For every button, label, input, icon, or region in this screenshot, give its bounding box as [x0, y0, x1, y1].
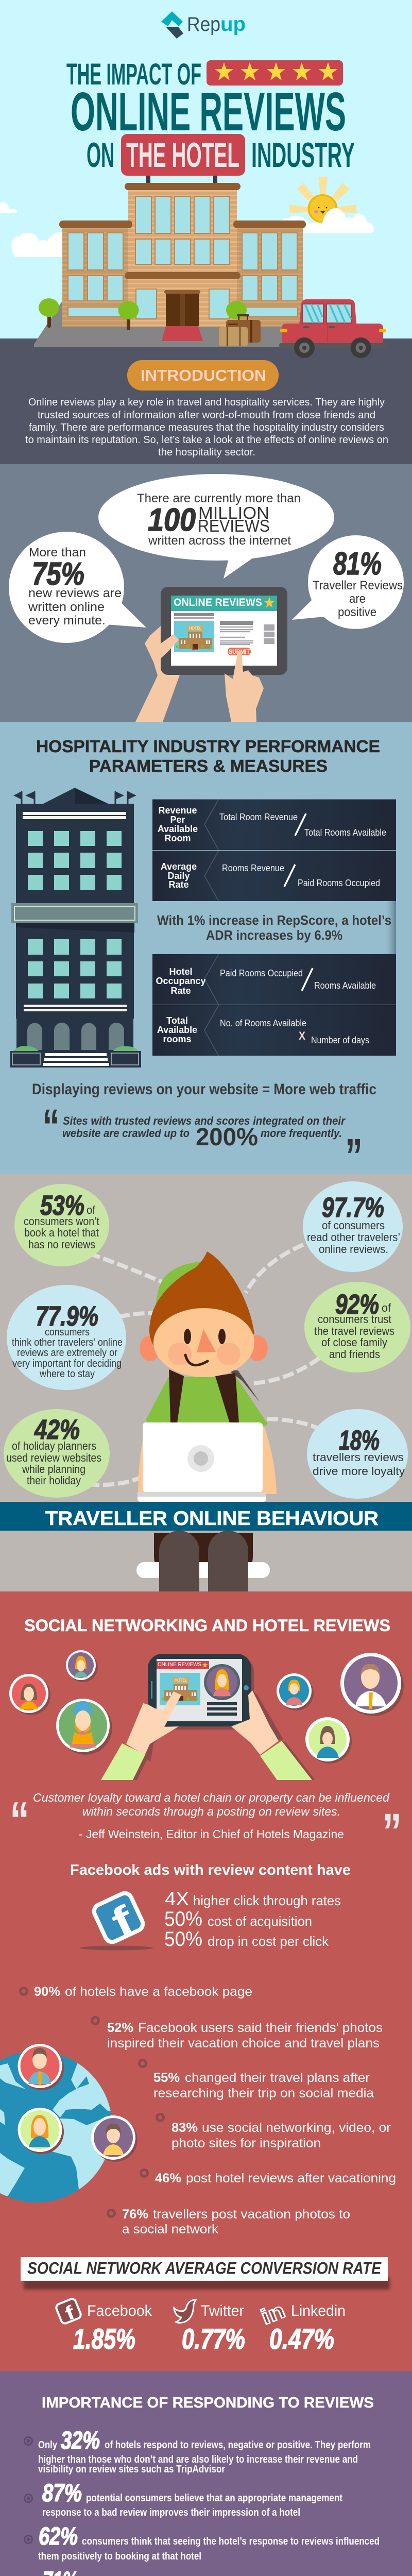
conversion: facebook — [55, 2298, 152, 2355]
speech bubble: 75% — [9, 532, 146, 643]
social tablet with hands — [101, 1654, 315, 1780]
stat: 87% — [42, 2480, 342, 2518]
table row: revenue per available room: Revenue — [158, 805, 197, 816]
quote: customer loyalty: within seconds through a posting on review sites. — [82, 1805, 340, 1818]
panel: social networking — [0, 1616, 404, 2355]
bullets — [24, 2436, 33, 2576]
bubble: 77.9%: 77.9% — [36, 1301, 98, 1332]
social stat list: photo sites for inspiration — [171, 2136, 321, 2150]
facebook ad stats: 50% — [164, 1908, 202, 1930]
table row: hotel occupancy rate — [152, 954, 396, 1005]
quote: crawled 200%: “ — [42, 1099, 60, 1154]
conversion: linkedin: in — [258, 2298, 288, 2329]
introduction paragraph: the hospitality sector. — [158, 447, 255, 458]
facebook ad stats: 4X — [165, 1888, 189, 1909]
speech bubble: 75%: 75% — [32, 556, 84, 592]
tablet with hands — [135, 587, 287, 722]
speech bubble: 75%: More than — [29, 546, 86, 560]
car — [279, 299, 386, 358]
quote: customer loyalty: “ — [10, 1791, 29, 1849]
five star badge — [207, 60, 343, 86]
conversion: twitter — [174, 2300, 245, 2355]
table row: average daily rate — [152, 851, 396, 901]
quote: customer loyalty: - Jeff Weinstein, Editor in Chief of Hotels Magazine — [79, 1827, 344, 1841]
bubble: 97.7%: 97.7% — [322, 1192, 384, 1223]
social tablet with hands: HOTEL — [175, 1678, 187, 1683]
quote: customer loyalty: Customer loyalty toward a hotel chain or property can be influenced — [33, 1791, 390, 1804]
tablet with hands: ONLINE REVIEWS — [174, 597, 262, 608]
bubble: 53% — [14, 1184, 109, 1266]
bubble: 77.9%: reviews are extremely or — [17, 1347, 117, 1359]
stat: 62% — [38, 2523, 380, 2562]
panel: review volume — [9, 474, 404, 722]
panel: importance of responding — [0, 2395, 412, 2576]
avatars around tablet — [9, 1650, 404, 1764]
bubble: 92%: of — [382, 1301, 391, 1314]
speech bubble: 100 million reviews — [98, 474, 334, 579]
hotel sign: THE HOTEL — [126, 135, 239, 175]
conversion rate heading box — [21, 2257, 390, 2290]
heading — [36, 737, 380, 775]
table row: revenue per available room — [152, 800, 396, 850]
conversion: facebook: 1.85% — [73, 2323, 135, 2355]
table row: revenue per available room: Per — [170, 815, 185, 825]
table row: average daily rate: Average — [161, 861, 197, 872]
table row: average daily rate: Rooms Revenue — [222, 863, 284, 873]
bubble: 77.9%: very important for deciding — [12, 1358, 122, 1369]
bubble: 77.9%: consumers — [45, 1327, 90, 1338]
heading: SOCIAL NETWORKING AND HOTEL REVIEWS — [24, 1616, 390, 1635]
facebook ad stats: cost of acquisition — [208, 1913, 312, 1929]
speech bubble: 100 million reviews: written across the internet — [148, 534, 291, 548]
bubble: 42%: of holiday planners — [12, 1439, 96, 1452]
conversion: linkedin — [258, 2298, 346, 2355]
social stat list: 76% — [122, 2207, 148, 2222]
quote: customer loyalty — [10, 1791, 402, 1861]
bubble: 53%: book a hotel that — [24, 1226, 99, 1239]
speech bubble: 100 million reviews: 100 — [148, 502, 196, 538]
stat: 62%: them positively to booking at that hotel — [38, 2551, 201, 2562]
heading: IMPORTANCE OF RESPONDING TO REVIEWS — [42, 2395, 374, 2411]
title: ON — [87, 135, 114, 175]
bubble: 97.7%: of consumers — [322, 1219, 385, 1232]
stat: 87%: potential consumers believe that an appropriate management — [86, 2493, 342, 2504]
bubble: 18%: 18% — [339, 1425, 380, 1456]
table row: hotel occupancy rate: Rooms Available — [314, 980, 376, 991]
icon: facebook — [80, 1888, 153, 1951]
quote: crawled 200%: Sites with trusted reviews and scores integrated on their — [63, 1114, 346, 1127]
table row: revenue per available room: Total Rooms Available — [304, 827, 386, 838]
stat: 32%: Only — [38, 2439, 58, 2451]
stat: 32%: 32% — [61, 2427, 100, 2454]
callout: repscore: ADR increases by 6.9% — [206, 927, 342, 943]
stat: 62%: 62% — [39, 2523, 78, 2550]
conversion: linkedin: Linkedin — [291, 2302, 346, 2319]
speech bubble: 75%: new reviews are — [28, 586, 122, 600]
heading: HOSPITALITY INDUSTRY PERFORMANCE — [36, 737, 380, 756]
heading: PARAMETERS & MEASURES — [89, 756, 328, 775]
bubble: 97.7%: read other travelers’ — [307, 1231, 400, 1244]
tablet with hands: SUBMIT — [229, 648, 250, 655]
conversion: facebook: Facebook — [87, 2302, 152, 2319]
bubble: 77.9% — [7, 1285, 126, 1390]
table row: total available rooms: X — [299, 1029, 305, 1042]
social stat list: of hotels have a facebook page — [65, 1985, 252, 1999]
bubble: 97.7%: online reviews. — [319, 1243, 388, 1256]
table row: total available rooms: No. of Rooms Available — [220, 1018, 306, 1028]
social stat list: 46% — [155, 2171, 181, 2185]
stat: 32%: visibility on review sites such as TripAdvisor — [38, 2464, 225, 2475]
banner: traveller online behaviour — [0, 1502, 412, 1531]
bubble: 92% — [304, 1282, 410, 1372]
social tablet with hands: ONLINE REVIEWS — [158, 1662, 201, 1668]
quote: crawled 200%: ” — [345, 1129, 363, 1183]
bubble: 92%: 92% — [335, 1289, 379, 1320]
facebook ad stats: 50% — [164, 1928, 202, 1951]
table row: average daily rate: Daily — [167, 871, 190, 881]
speech bubble: 81%: are — [349, 592, 366, 606]
introduction pill: INTRODUCTION — [141, 366, 266, 384]
hotel building — [34, 183, 306, 347]
speech bubble: 100 million reviews: REVIEWS — [198, 516, 270, 535]
social stat list: travellers post vacation photos to — [153, 2207, 350, 2222]
bubble: 92%: the travel reviews — [314, 1325, 394, 1337]
callout: repscore: With 1% increase in RepScore, a hotel’s — [157, 912, 391, 928]
introduction paragraph — [25, 397, 388, 458]
stat: 32%: of hotels respond to reviews, negative or positive. They perform — [105, 2439, 371, 2451]
bubble: 77.9%: think other travelers' online — [12, 1337, 123, 1348]
panel: performance parameters — [10, 737, 396, 1183]
bubble: 77.9%: where to stay — [39, 1368, 95, 1380]
bubble: 92%: of close family — [321, 1336, 387, 1349]
table row: hotel occupancy rate: Hotel — [169, 967, 193, 977]
bubble: 18% — [307, 1409, 408, 1499]
icon: facebook: f — [105, 1897, 141, 1945]
title — [66, 58, 355, 175]
stat: 32% — [38, 2427, 371, 2475]
stat: 87%: response to a bad review improves their impression of a hotel — [42, 2507, 300, 2518]
social stat list: 55% — [153, 2071, 180, 2085]
dashed connectors — [88, 1245, 320, 1485]
bubble: 42% — [4, 1409, 110, 1498]
social stat list: inspired their vacation choice and travel plans — [107, 2036, 380, 2050]
bubble: 53%: consumers won’t — [24, 1215, 99, 1228]
table row: total available rooms: Available — [157, 1025, 197, 1035]
table row: revenue per available room: Total Room Revenue — [219, 812, 298, 822]
quote: crawled 200% — [42, 1099, 363, 1183]
speech bubble: 81%: Traveller Reviews — [313, 579, 403, 592]
table row: average daily rate: Paid Rooms Occupied — [298, 878, 380, 888]
speech bubble: 81% — [292, 535, 404, 629]
logo: Repup: Rep — [187, 13, 220, 36]
sun — [289, 177, 356, 223]
table row: total available rooms: Number of days — [311, 1035, 369, 1045]
bubble: 18%: drive more loyalty — [313, 1465, 405, 1478]
social stat list: Facebook users said their friends’ photos — [138, 2021, 383, 2035]
social stat list: 52% — [107, 2021, 133, 2035]
bubble: 92%: consumers trust — [318, 1313, 391, 1326]
panel: header — [0, 11, 386, 358]
table row: average daily rate: Rate — [168, 879, 189, 890]
banner: traveller online behaviour: TRAVELLER ONLINE BEHAVIOUR — [45, 1507, 379, 1530]
social stat list: 90% — [34, 1985, 60, 1999]
logo: Repup — [161, 11, 246, 39]
quote: crawled 200%: 200% — [196, 1124, 258, 1151]
stat: 32%: higher than those who don’t and are also likely to increase their revenue and — [38, 2454, 358, 2465]
table row: hotel occupancy rate: Occupancy — [156, 976, 206, 986]
speech bubble: 75%: every minute. — [28, 614, 106, 628]
social stat list: changed their travel plans after — [185, 2071, 370, 2085]
social stat list — [21, 1985, 396, 2236]
table row: hotel occupancy rate: Paid Rooms Occupied — [220, 968, 303, 978]
facebook ad stats: drop in cost per click — [208, 1934, 329, 1949]
panel: traveller behaviour — [0, 1181, 412, 1591]
bubble: 92%: and friends — [329, 1348, 380, 1361]
trees — [39, 298, 247, 330]
bubble: 42%: while planning — [22, 1463, 85, 1476]
speech bubble: 81%: positive — [338, 605, 376, 619]
introduction paragraph: trusted sources of information after word-of-mouth from close friends and — [38, 410, 375, 421]
introduction paragraph: to maintain its reputation. So, let’s take a look at the effects of online reviews on — [25, 434, 388, 446]
facebook ads heading: Facebook ads with review content have — [70, 1862, 351, 1878]
bubble: 18%: travellers reviews — [313, 1451, 404, 1464]
tablet with hands: HOTEL — [189, 626, 201, 631]
speech bubble: 100 million reviews: MILLION — [198, 503, 269, 522]
panel: introduction — [25, 360, 388, 458]
table row: total available rooms: rooms — [163, 1034, 192, 1044]
social stat list: a social network — [122, 2222, 219, 2236]
conversion: twitter: 0.77% — [182, 2323, 245, 2355]
social stat list: researching their trip on social media — [153, 2086, 374, 2100]
quote: crawled 200%: more frequently. — [261, 1127, 342, 1140]
fold shadow — [384, 901, 396, 954]
conversion: twitter: Twitter — [201, 2302, 244, 2319]
conversion: linkedin: 0.47% — [269, 2323, 334, 2355]
social stat list: 83% — [171, 2121, 198, 2135]
traveller illustration — [136, 1251, 277, 1591]
bubble: 53%: has no reviews — [28, 1238, 95, 1251]
globe with avatars — [0, 2044, 138, 2202]
bubble: 53%: 53% — [40, 1190, 84, 1221]
bubble: 42%: their holiday — [27, 1474, 81, 1487]
table row: revenue per available room: Room — [165, 833, 191, 843]
social stat list: use social networking, video, or — [202, 2121, 391, 2135]
clouds — [0, 201, 374, 257]
bubble: 97.7% — [303, 1181, 403, 1272]
introduction paragraph: family. There are performance measures that the hospitality industry considers — [29, 422, 384, 433]
bubble: 42%: 42% — [34, 1414, 80, 1445]
building illustration — [10, 788, 141, 1067]
speech bubble: 100 million reviews: There are currently more than — [137, 492, 301, 505]
title: THE IMPACT OF — [66, 58, 201, 91]
speech bubble: 75%: written online — [28, 600, 105, 614]
table row: revenue per available room: Available — [158, 824, 198, 834]
table row: total available rooms — [152, 1005, 396, 1056]
hotel sign — [121, 134, 245, 183]
table row: total available rooms: Total — [166, 1015, 188, 1026]
facebook ad stats — [164, 1888, 341, 1951]
conversion: facebook: f — [62, 2302, 78, 2325]
speech bubble: 81%: 81% — [333, 546, 382, 582]
stat: 87%: 87% — [42, 2480, 82, 2507]
social stat list: post hotel reviews after vacationing — [186, 2171, 396, 2185]
introduction paragraph: Online reviews play a key role in travel and hospitality services. They are highly — [28, 397, 385, 408]
quote: crawled 200%: website are crawled up to — [62, 1127, 190, 1140]
facebook ad stats: higher click through rates — [193, 1893, 341, 1908]
table row: hotel occupancy rate: Rate — [170, 986, 191, 996]
bubble: 42%: used review websites — [6, 1451, 101, 1464]
callout: repscore — [157, 912, 391, 943]
luggage — [219, 314, 261, 346]
quote: customer loyalty: ” — [382, 1803, 402, 1861]
logo: Repup: up — [220, 13, 246, 36]
introduction pill — [127, 360, 279, 391]
bubble: 53%: of — [87, 1204, 96, 1216]
